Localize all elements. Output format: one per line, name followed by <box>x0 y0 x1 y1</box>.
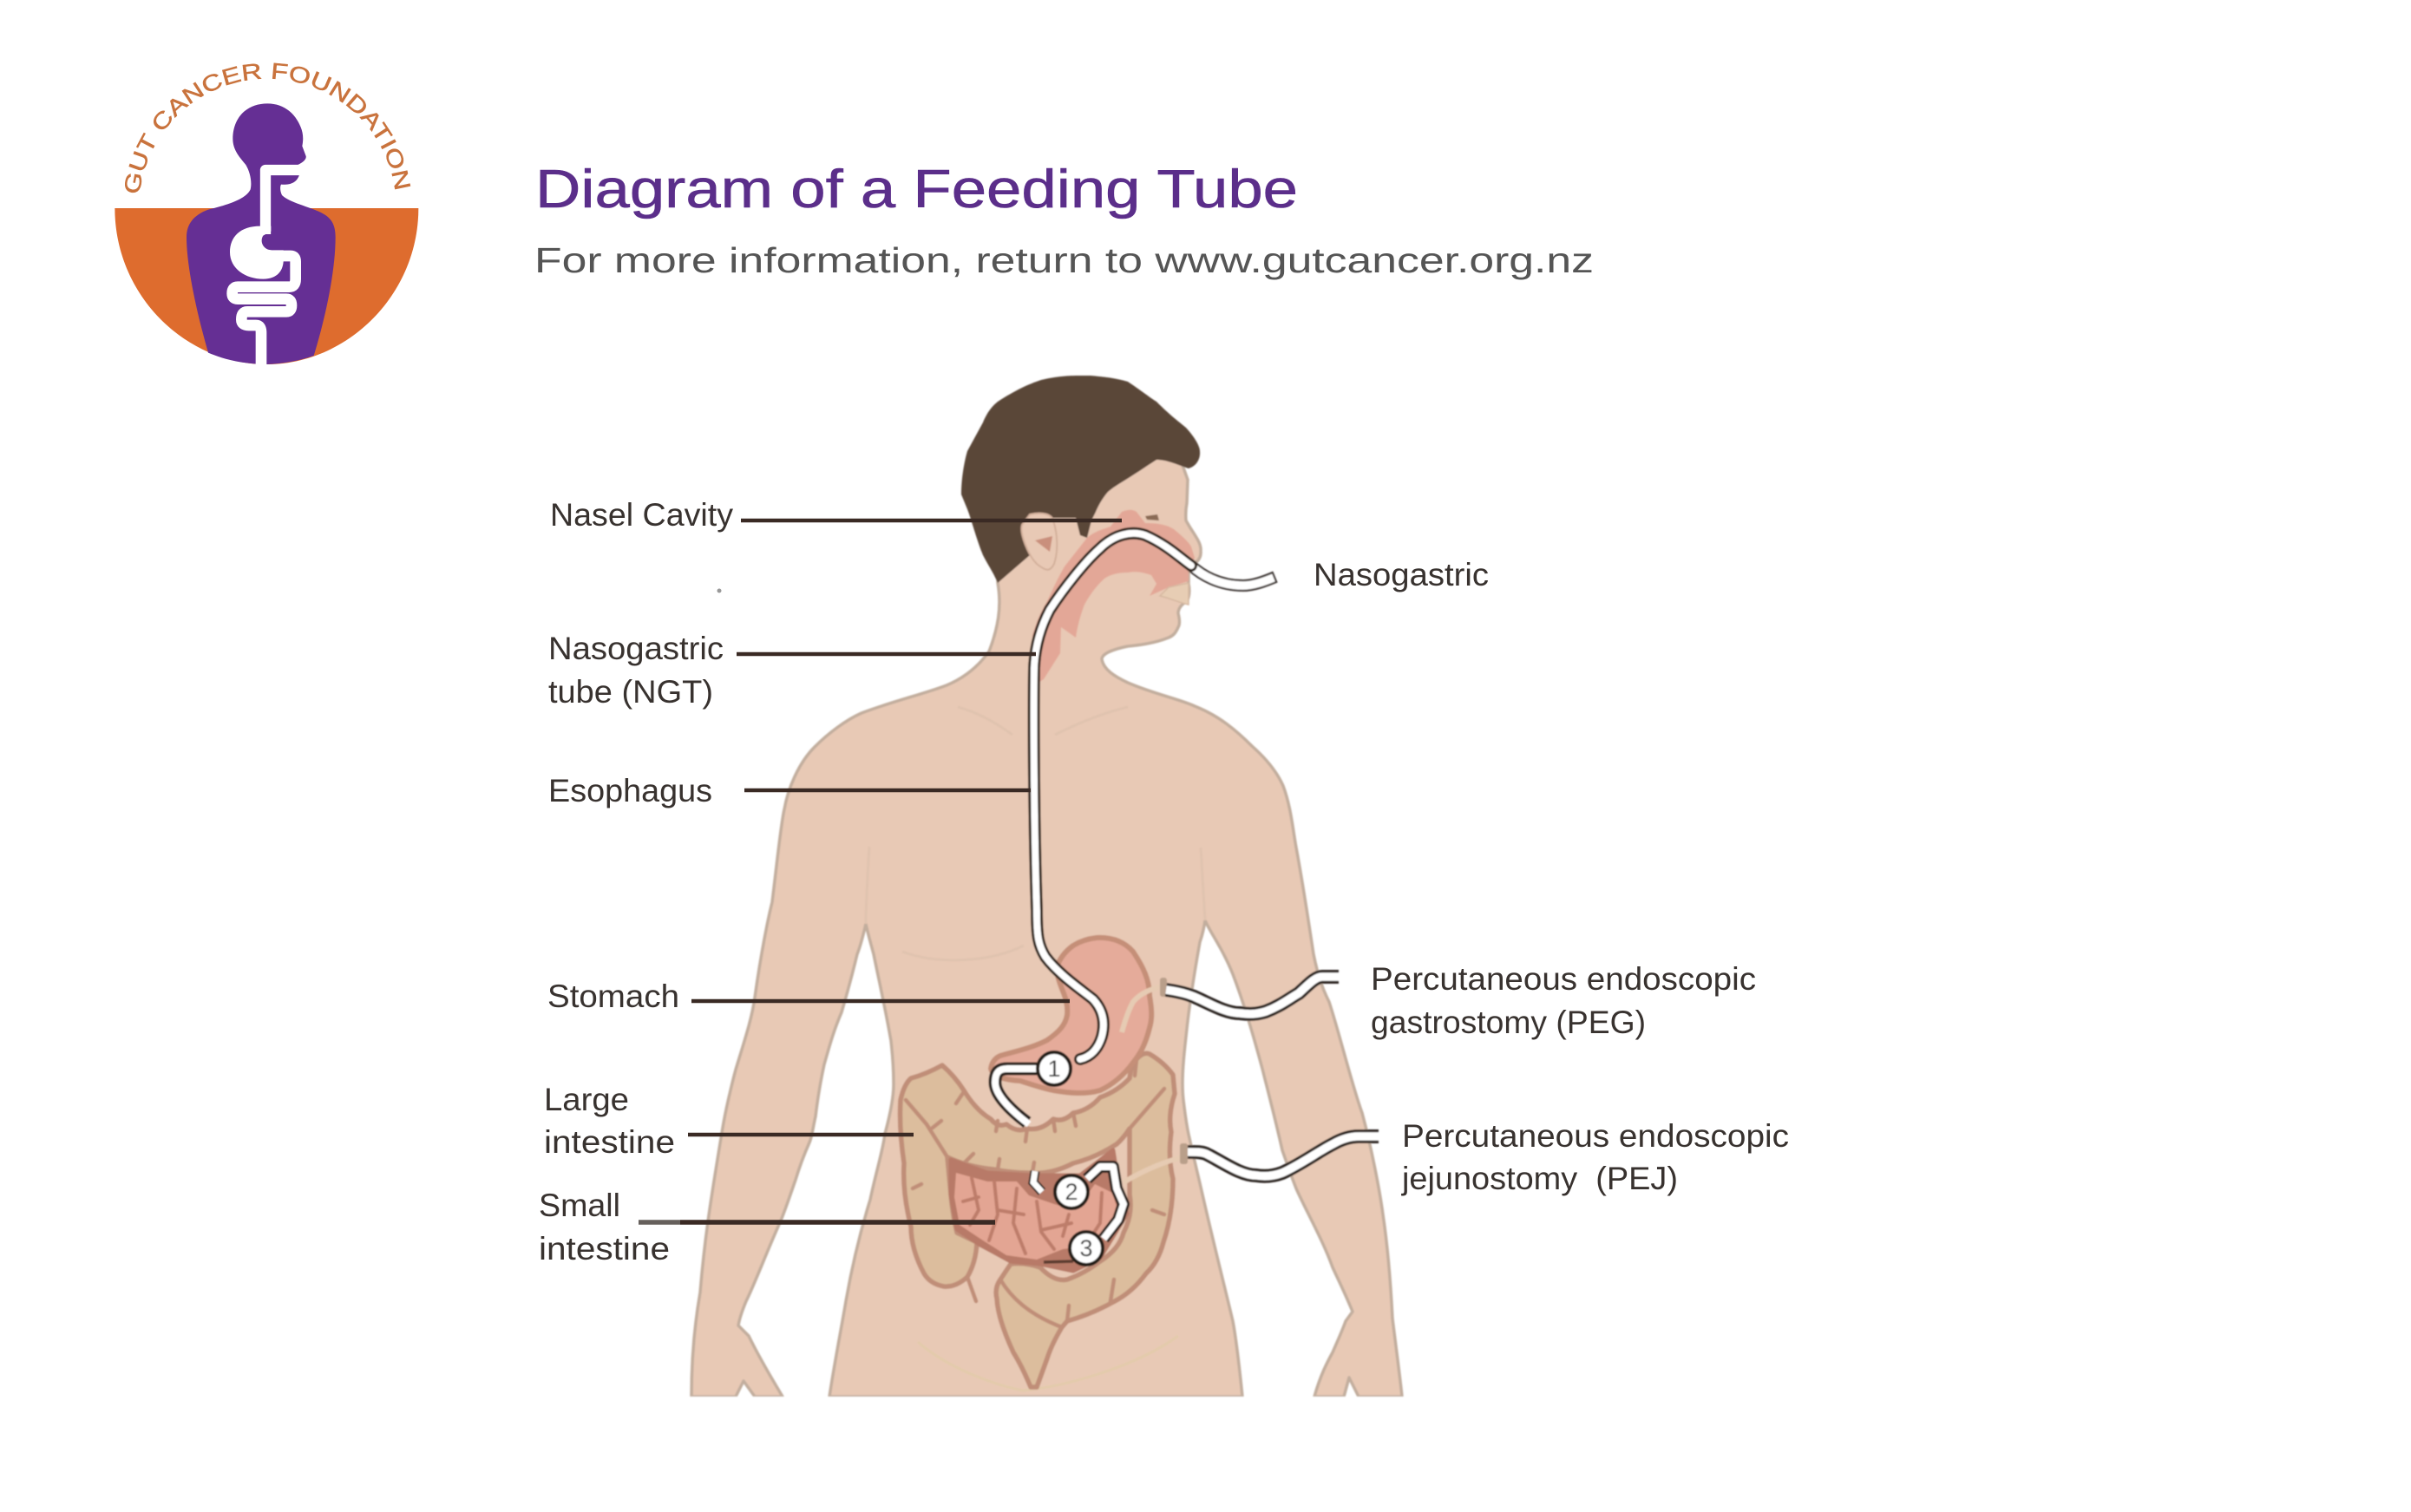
logo: curved wordmark <box>140 79 396 195</box>
label: PEJ: jejunostomy (PEJ) <box>1401 1161 1678 1196</box>
PEG inner catheter <box>1122 986 1162 1032</box>
leader: esophagus <box>744 789 1031 792</box>
label: PEG <box>1371 961 1756 1040</box>
logo: orange half disc <box>115 208 418 364</box>
ear <box>1021 514 1057 570</box>
label: small intestine: intestine <box>539 1231 670 1267</box>
label: stomach: Stomach <box>547 979 679 1014</box>
leader: nasogastric tube <box>737 652 1036 656</box>
label: nasal cavity: Nasel Cavity <box>550 497 733 533</box>
logo: white digestive tract <box>230 170 299 364</box>
label: large intestine: Large <box>544 1082 629 1117</box>
PEJ inner catheter <box>1124 1157 1183 1182</box>
human body illustration <box>677 376 1423 1407</box>
leader start: small intestine <box>639 1220 680 1225</box>
title: Diagram of a Feeding Tube <box>535 160 1298 219</box>
leader: large intestine <box>688 1133 914 1136</box>
nasogastric tube outside nose <box>1191 566 1275 586</box>
subtitle: For more information, return to www.gutcancer.org.nz <box>534 240 1594 280</box>
small intestine <box>951 1150 1127 1271</box>
logo: Gut Cancer Foundation: GUT CANCER FOUNDATION <box>125 62 411 193</box>
label: PEG: Percutaneous endoscopic <box>1371 961 1756 997</box>
tube in jejunum <box>1087 1167 1124 1239</box>
PEJ external tube <box>1188 1136 1379 1176</box>
label: esophagus: Esophagus <box>548 773 712 808</box>
eye mark <box>1145 514 1159 520</box>
position marker 2 <box>1055 1175 1088 1208</box>
nasogastric tube inside body <box>1034 533 1191 1059</box>
label: nasogastric tube: tube (NGT) <box>548 674 713 710</box>
PEG clamp <box>1160 978 1167 997</box>
label: small intestine: Small <box>539 1188 620 1223</box>
position marker 2: 2 <box>1065 1179 1078 1205</box>
position marker 3: 3 <box>1079 1235 1093 1261</box>
label: nasogastric: Nasogastric <box>1314 557 1489 592</box>
position marker 1: 1 <box>1047 1056 1061 1082</box>
label: nasogastric tube <box>548 631 724 710</box>
stomach <box>991 938 1151 1093</box>
colon: large intestine <box>901 1053 1175 1387</box>
marker line at 3 <box>1044 1261 1073 1262</box>
nasal and oral cavity <box>1032 510 1195 683</box>
body skin creases <box>866 707 1205 1391</box>
speck <box>717 588 722 593</box>
label: large intestine <box>544 1082 675 1160</box>
label: PEG: gastrostomy (PEG) <box>1371 1005 1646 1040</box>
body silhouette <box>691 434 1402 1397</box>
logo: purple human silhouette <box>187 103 336 364</box>
position marker 3 <box>1070 1232 1103 1265</box>
leader: small intestine <box>680 1220 995 1225</box>
position marker 1 <box>1038 1052 1071 1085</box>
leader: nasal cavity <box>741 519 1122 522</box>
tube into duodenum <box>995 1069 1037 1124</box>
label: PEJ <box>1401 1118 1789 1196</box>
label: large intestine: intestine <box>544 1124 675 1160</box>
tube fragment <box>1033 1171 1042 1192</box>
pelvis bottom trim <box>677 1397 1423 1407</box>
PEG external tube <box>1166 977 1339 1014</box>
logo: Gut Cancer Foundation <box>115 62 418 364</box>
leader: stomach <box>691 999 1070 1003</box>
PEJ clamp <box>1180 1143 1188 1164</box>
label: nasogastric tube: Nasogastric <box>548 631 724 666</box>
label: small intestine <box>539 1188 670 1267</box>
label: PEJ: Percutaneous endoscopic <box>1402 1118 1789 1154</box>
lips <box>1160 583 1189 605</box>
hair <box>961 376 1200 583</box>
